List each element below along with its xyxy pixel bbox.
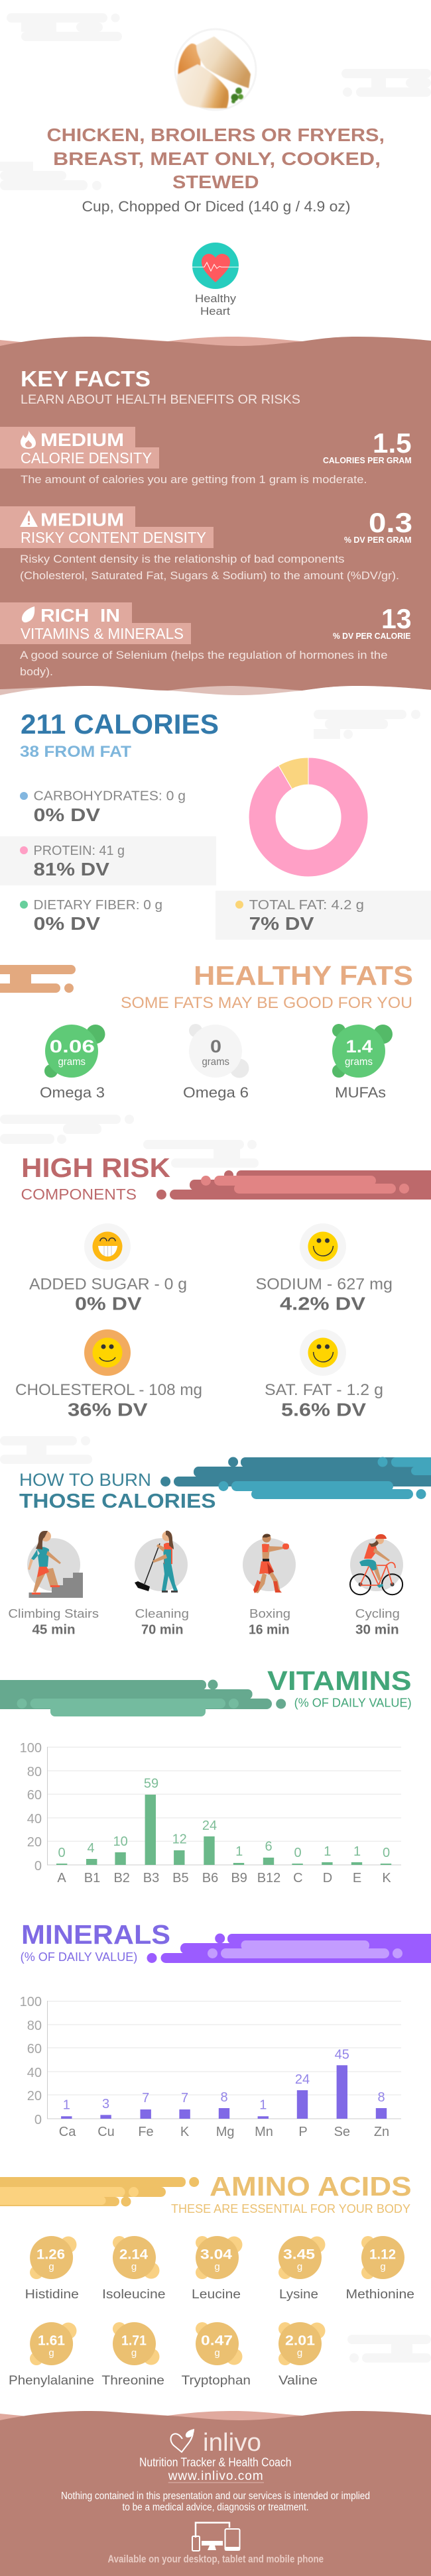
bar chart: vitamins: 40 bbox=[27, 1812, 42, 1826]
mufas: MUFAs bbox=[335, 1084, 386, 1101]
amino acid: valine: g bbox=[297, 2347, 302, 2359]
title: BREAST, MEAT ONLY, COOKED, bbox=[53, 148, 381, 169]
bar chart: vitamins: 6 bbox=[265, 1840, 273, 1854]
amino acid: isoleucine bbox=[102, 2236, 166, 2302]
footer tagline: www.inlivo.com bbox=[168, 2469, 263, 2483]
legend: carbohydrates: CARBOHYDRATES: 0 g bbox=[33, 789, 186, 804]
risk: cholesterol: 36% DV bbox=[68, 1400, 148, 1420]
calories heading bbox=[20, 708, 219, 761]
amino acid: valine bbox=[278, 2322, 325, 2388]
bar chart: vitamins: B5 bbox=[172, 1871, 189, 1885]
amino acid: leucine: g bbox=[214, 2261, 220, 2272]
food photo bbox=[175, 29, 256, 110]
bar chart: vitamins: 80 bbox=[27, 1765, 42, 1779]
amino acid: histidine: g bbox=[48, 2261, 54, 2272]
bar chart: vitamins: 59 bbox=[144, 1777, 158, 1791]
activity: cycling bbox=[350, 1534, 403, 1638]
bar chart: vitamins: 0 bbox=[34, 1859, 42, 1874]
amino acid: tryptophan: Tryptophan bbox=[182, 2374, 251, 2388]
calories heading: 38 FROM FAT bbox=[20, 743, 131, 761]
heading: vitamins: VITAMINS bbox=[267, 1665, 412, 1696]
bar chart: minerals: Zn bbox=[374, 2125, 389, 2139]
title bbox=[46, 125, 385, 192]
mufas: 1.4 bbox=[346, 1036, 373, 1056]
bar chart: vitamins: C bbox=[293, 1871, 303, 1885]
amino acid: phenylalanine bbox=[9, 2322, 94, 2388]
amino acid: lysine bbox=[278, 2236, 325, 2302]
heading: minerals: MINERALS bbox=[21, 1919, 170, 1950]
bar chart: minerals: 8 bbox=[220, 2090, 228, 2105]
mufas bbox=[332, 1024, 393, 1101]
bar chart: minerals: Fe bbox=[138, 2125, 154, 2139]
bar chart: vitamins: 0 bbox=[383, 1846, 390, 1860]
legend: dietary fiber bbox=[20, 898, 162, 934]
risk: cholesterol: CHOLESTEROL - 108 mg bbox=[15, 1381, 202, 1399]
activity: boxing bbox=[243, 1534, 296, 1638]
bar chart: minerals: 8 bbox=[377, 2090, 385, 2105]
risk: added sugar: ADDED SUGAR - 0 g bbox=[29, 1276, 187, 1294]
bar chart: minerals: 0 bbox=[34, 2113, 42, 2127]
bar chart: minerals: 40 bbox=[27, 2066, 42, 2080]
amino acid: methionine: Methionine bbox=[346, 2288, 414, 2302]
fact: risky content density: Risky Content density is the relationship of bad components bbox=[20, 553, 345, 565]
fact: risky content density: RISKY CONTENT DENSITY bbox=[21, 529, 206, 546]
bar chart: minerals: Mn bbox=[255, 2125, 273, 2139]
bar chart: vitamins: B9 bbox=[231, 1871, 247, 1885]
icon: healthy heart bbox=[192, 243, 239, 289]
panel: key facts bbox=[0, 337, 431, 706]
amino acid: leucine: Leucine bbox=[192, 2288, 241, 2302]
amino acid: threonine bbox=[101, 2322, 164, 2388]
activity: climbing stairs: Climbing Stairs bbox=[8, 1607, 99, 1620]
amino acid: leucine: 3.04 bbox=[200, 2247, 232, 2263]
risk: saturated fat: 5.6% DV bbox=[281, 1400, 366, 1420]
risk: cholesterol bbox=[15, 1329, 202, 1420]
bar chart: minerals: 45 bbox=[335, 2048, 349, 2062]
amino acid: threonine: g bbox=[131, 2347, 137, 2359]
fact: rich in vitamins and minerals: VITAMINS & MINERALS bbox=[21, 625, 184, 642]
amino acid: phenylalanine: 1.61 bbox=[38, 2333, 65, 2349]
bar chart: vitamins bbox=[20, 1741, 401, 1885]
banner: amino acids bbox=[0, 2177, 199, 2207]
bar chart: vitamins: 60 bbox=[27, 1788, 42, 1803]
heading: vitamins bbox=[267, 1665, 412, 1710]
bar chart: vitamins: A bbox=[57, 1871, 66, 1885]
bar chart: minerals: 80 bbox=[27, 2019, 42, 2033]
bar chart: minerals: 24 bbox=[295, 2072, 310, 2087]
key facts heading: KEY FACTS bbox=[21, 366, 151, 391]
bar chart: vitamins: 24 bbox=[202, 1819, 217, 1833]
risk: sodium: SODIUM - 627 mg bbox=[256, 1276, 393, 1294]
amino acid: threonine: Threonine bbox=[101, 2374, 164, 2388]
risk: saturated fat: SAT. FAT - 1.2 g bbox=[265, 1381, 383, 1399]
title: STEWED bbox=[172, 172, 259, 192]
bar chart: vitamins: 1 bbox=[235, 1844, 243, 1859]
fact: risky content density: 0.3 bbox=[369, 507, 412, 538]
bar chart: vitamins: 1 bbox=[324, 1844, 331, 1859]
key facts heading bbox=[21, 366, 300, 407]
fact: calorie density: MEDIUM bbox=[40, 429, 124, 450]
amino acid: leucine bbox=[192, 2236, 243, 2302]
healthy heart label: Healthy bbox=[195, 292, 237, 305]
legend: carbohydrates bbox=[20, 789, 186, 825]
activity: cleaning: 70 min bbox=[141, 1623, 183, 1638]
amino acid: isoleucine: g bbox=[131, 2261, 137, 2272]
fact: calorie density: CALORIE DENSITY bbox=[21, 449, 152, 467]
fact: rich in vitamins and minerals: 13 bbox=[381, 603, 412, 634]
amino acid: lysine: Lysine bbox=[279, 2288, 318, 2302]
amino acid: phenylalanine: g bbox=[48, 2347, 54, 2359]
amino acid: phenylalanine: Phenylalanine bbox=[9, 2374, 94, 2388]
fact: rich in vitamins and minerals: A good source of Selenium (helps the regulation of hormones in the bbox=[20, 649, 388, 661]
legend: protein: 81% DV bbox=[33, 859, 109, 879]
legend: total fat bbox=[216, 891, 431, 940]
banner: burn calories bbox=[160, 1457, 431, 1499]
heading: amino acids bbox=[171, 2171, 412, 2215]
activity: cleaning: Cleaning bbox=[135, 1607, 189, 1620]
bar chart: vitamins: B1 bbox=[84, 1871, 100, 1885]
amino acid: histidine bbox=[25, 2236, 79, 2302]
icon: devices bbox=[192, 2522, 240, 2551]
amino acid: lysine: 3.45 bbox=[283, 2247, 315, 2263]
heading: high risk: COMPONENTS bbox=[21, 1186, 137, 1203]
logo: inlivo bbox=[171, 2429, 261, 2457]
legend: total fat: TOTAL FAT: 4.2 g bbox=[249, 898, 364, 913]
healthy heart label: Heart bbox=[200, 305, 230, 317]
risk: sodium: 4.2% DV bbox=[280, 1294, 365, 1314]
title: CHICKEN, BROILERS OR FRYERS, bbox=[46, 125, 385, 145]
heading: amino acids: AMINO ACIDS bbox=[210, 2171, 412, 2202]
bar chart: vitamins: D bbox=[323, 1871, 332, 1885]
omega 3: grams bbox=[58, 1056, 86, 1068]
logo: inlivo: inlivo bbox=[203, 2429, 261, 2457]
bar chart: vitamins: B6 bbox=[202, 1871, 218, 1885]
amino acid: methionine bbox=[346, 2236, 414, 2302]
activity: boxing: 16 min bbox=[249, 1623, 289, 1638]
fact: risky content density bbox=[0, 506, 412, 582]
omega 6: Omega 6 bbox=[183, 1084, 249, 1101]
bar chart: vitamins: 10 bbox=[113, 1834, 128, 1849]
bar chart: minerals: 7 bbox=[142, 2091, 149, 2105]
bar chart: minerals bbox=[20, 1995, 401, 2139]
bar chart: minerals: 1 bbox=[63, 2098, 70, 2113]
activity: cleaning bbox=[135, 1531, 189, 1638]
legend: protein bbox=[0, 836, 216, 885]
disclaimer: to be a medical advice, diagnosis or treatment. bbox=[122, 2502, 309, 2513]
mufas: grams bbox=[345, 1056, 373, 1068]
legend: dietary fiber: 0% DV bbox=[33, 913, 100, 934]
bar chart: vitamins: 0 bbox=[294, 1846, 302, 1860]
fact: rich in vitamins and minerals: body). bbox=[20, 665, 53, 678]
bar chart: minerals: 60 bbox=[27, 2042, 42, 2056]
fact: calorie density: The amount of calories you are getting from 1 gram is moderate. bbox=[21, 473, 367, 486]
bar chart: minerals: 7 bbox=[181, 2091, 188, 2105]
omega 3: Omega 3 bbox=[40, 1084, 105, 1101]
bar chart: minerals: P bbox=[298, 2125, 308, 2139]
heading: amino acids: THESE ARE ESSENTIAL FOR YOUR BODY bbox=[171, 2202, 410, 2215]
activity: climbing stairs: 45 min bbox=[32, 1623, 76, 1638]
bar chart: vitamins: B2 bbox=[113, 1871, 130, 1885]
bar chart: minerals: 1 bbox=[259, 2098, 267, 2113]
fact: calorie density: 1.5 bbox=[373, 427, 412, 459]
healthy heart label bbox=[195, 292, 237, 317]
bar chart: minerals: 20 bbox=[27, 2089, 42, 2103]
bar chart: vitamins: 4 bbox=[87, 1841, 95, 1856]
bar chart: minerals: 3 bbox=[102, 2097, 109, 2111]
heading: how to burn bbox=[19, 1470, 216, 1512]
panel: footer bbox=[0, 2411, 431, 2576]
risk: sodium bbox=[256, 1223, 393, 1314]
amino acid: isoleucine: Isoleucine bbox=[102, 2288, 166, 2302]
amino acid: tryptophan: g bbox=[214, 2347, 220, 2359]
legend: carbohydrates: 0% DV bbox=[33, 805, 100, 825]
amino acid: isoleucine: 2.14 bbox=[119, 2247, 148, 2263]
heading: high risk: HIGH RISK bbox=[21, 1152, 170, 1183]
disclaimer: Nothing contained in this presentation and our services is intended or implied bbox=[61, 2491, 370, 2502]
amino acid: lysine: g bbox=[297, 2261, 302, 2272]
bar chart: minerals: Mg bbox=[216, 2125, 234, 2139]
amino acid: tryptophan bbox=[182, 2322, 251, 2388]
serving size: Cup, Chopped Or Diced (140 g / 4.9 oz) bbox=[82, 198, 350, 215]
bar chart: vitamins: E bbox=[353, 1871, 361, 1885]
amino acid: valine: Valine bbox=[278, 2374, 318, 2388]
amino acid: methionine: g bbox=[380, 2261, 386, 2272]
omega 6 bbox=[183, 1024, 249, 1101]
bar chart: vitamins: K bbox=[382, 1871, 391, 1885]
bar chart: vitamins: 12 bbox=[172, 1832, 187, 1847]
legend: total fat: 7% DV bbox=[249, 913, 314, 934]
fact: calorie density bbox=[0, 427, 412, 486]
fact: calorie density: CALORIES PER GRAM bbox=[323, 455, 412, 465]
bar chart: minerals: Se bbox=[334, 2125, 350, 2139]
calories heading: 211 CALORIES bbox=[21, 708, 219, 740]
amino acid: threonine: 1.71 bbox=[121, 2333, 147, 2349]
bar chart: minerals: Ca bbox=[59, 2125, 76, 2139]
bar chart: minerals: K bbox=[180, 2125, 190, 2139]
amino acid: tryptophan: 0.47 bbox=[201, 2333, 233, 2349]
banner: healthy fats bbox=[0, 965, 76, 993]
banner: vitamins bbox=[0, 1679, 286, 1716]
fact: risky content density: % DV PER GRAM bbox=[344, 535, 412, 545]
fact: rich in vitamins and minerals bbox=[0, 602, 412, 678]
activity: cycling: Cycling bbox=[355, 1607, 400, 1620]
heading: healthy fats: SOME FATS MAY BE GOOD FOR YOU bbox=[121, 994, 412, 1012]
amino acid: histidine: 1.26 bbox=[36, 2247, 65, 2263]
heading: how to burn: THOSE CALORIES bbox=[19, 1489, 216, 1512]
donut chart bbox=[249, 757, 368, 877]
key facts heading: LEARN ABOUT HEALTH BENEFITS OR RISKS bbox=[21, 392, 300, 407]
bar chart: vitamins: 1 bbox=[353, 1844, 361, 1859]
heading: minerals bbox=[21, 1919, 170, 1964]
fact: rich in vitamins and minerals: % DV PER CALORIE bbox=[333, 631, 411, 641]
activity: climbing stairs bbox=[8, 1531, 99, 1638]
disclaimer bbox=[61, 2491, 370, 2513]
heading: healthy fats bbox=[121, 960, 413, 1012]
bar chart: vitamins: 20 bbox=[27, 1835, 42, 1850]
fact: rich in vitamins and minerals: RICH IN bbox=[40, 605, 120, 626]
activity: boxing: Boxing bbox=[249, 1607, 290, 1620]
heading: vitamins: (% OF DAILY VALUE) bbox=[294, 1697, 412, 1710]
bar chart: vitamins: B12 bbox=[257, 1871, 280, 1885]
bar chart: minerals: 100 bbox=[20, 1995, 42, 2009]
amino acid: valine: 2.01 bbox=[285, 2333, 315, 2349]
omega 3 bbox=[40, 1025, 105, 1101]
legend: dietary fiber: DIETARY FIBER: 0 g bbox=[33, 898, 162, 913]
risk: added sugar bbox=[29, 1223, 187, 1314]
heading: healthy fats: HEALTHY FATS bbox=[194, 960, 413, 991]
bar chart: vitamins: 0 bbox=[58, 1846, 66, 1860]
omega 6: grams bbox=[202, 1056, 229, 1068]
bar chart: vitamins: 100 bbox=[20, 1741, 42, 1756]
legend: protein: PROTEIN: 41 g bbox=[33, 844, 125, 858]
footer tagline: Nutrition Tracker & Health Coach bbox=[139, 2456, 292, 2469]
risk: saturated fat bbox=[265, 1329, 383, 1420]
footer tagline bbox=[139, 2456, 292, 2483]
lower wave bbox=[0, 686, 431, 702]
activity: cycling: 30 min bbox=[355, 1623, 399, 1638]
amino acid: methionine: 1.12 bbox=[369, 2247, 396, 2263]
amino acid: histidine: Histidine bbox=[25, 2288, 79, 2302]
heading: minerals: (% OF DAILY VALUE) bbox=[21, 1950, 137, 1964]
fact: risky content density: (Cholesterol, Saturated Fat, Sugars & Sodium) to the amount (%DV/gr). bbox=[20, 569, 399, 582]
omega 6: 0 bbox=[210, 1036, 221, 1056]
banner: minerals bbox=[147, 1934, 431, 1963]
availability note: Available on your desktop, tablet and mobile phone bbox=[107, 2554, 324, 2565]
banner: high risk bbox=[156, 1170, 431, 1200]
bar chart: minerals: Cu bbox=[97, 2125, 115, 2139]
heading: high risk bbox=[21, 1152, 170, 1203]
fact: risky content density: MEDIUM bbox=[40, 509, 124, 530]
risk: added sugar: 0% DV bbox=[75, 1294, 142, 1314]
bar chart: vitamins: B3 bbox=[143, 1871, 159, 1885]
omega 3: 0.06 bbox=[50, 1036, 95, 1056]
heading: how to burn: HOW TO BURN bbox=[19, 1470, 151, 1490]
